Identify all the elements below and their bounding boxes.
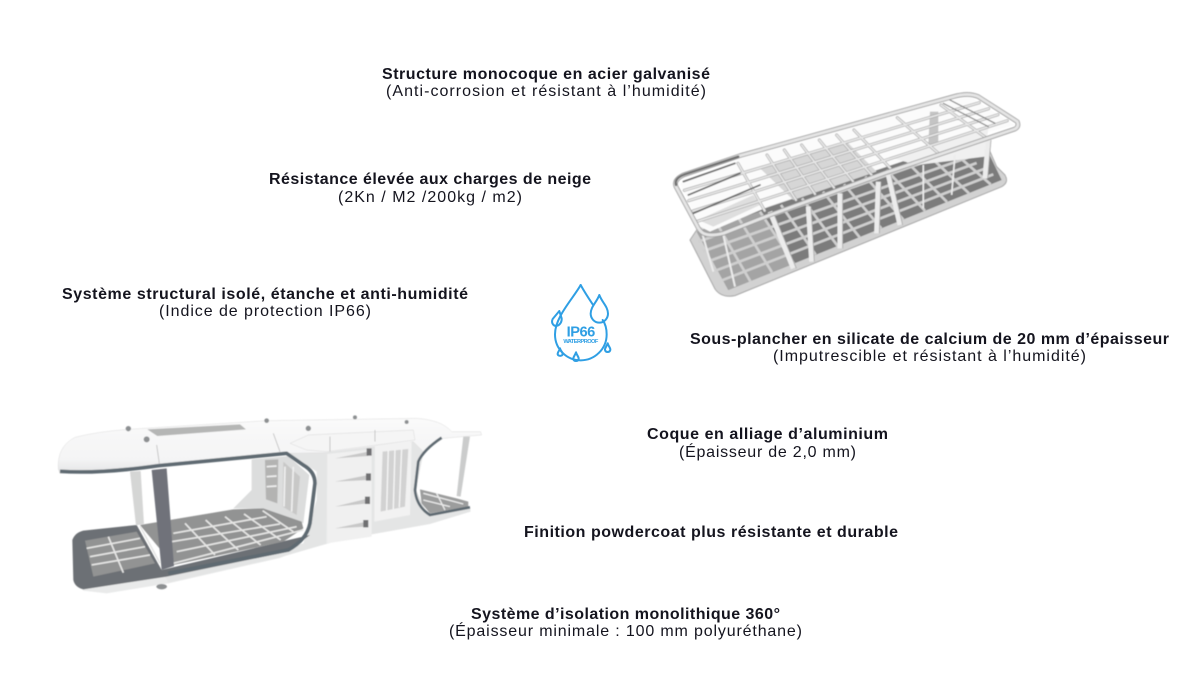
blue-grey edge trim: [60, 453, 315, 573]
roof: [58, 418, 482, 473]
floor grid: [87, 511, 303, 573]
right post: [457, 437, 470, 497]
right floor: [420, 489, 468, 513]
text block: monolithic insulation: (Épaisseur minimale : 100 mm polyuréthane): [449, 621, 802, 640]
floor deck: [72, 525, 310, 589]
text block: calcium silicate subfloor: Sous-plancher en silicate de calcium de 20 mm d’épaisseur: [690, 331, 1169, 348]
ventilation panel: [374, 442, 412, 522]
text block: calcium silicate subfloor: [690, 331, 1169, 365]
text block: aluminium shell: (Épaisseur de 2,0 mm): [679, 442, 856, 461]
wall panels: [327, 449, 372, 543]
right opening trim: [415, 438, 470, 515]
text block: monocoque structure: Structure monocoque en acier galvanisé: [382, 66, 710, 83]
text block: snow load resistance: [269, 171, 591, 206]
floor grid: [698, 148, 993, 281]
text block: insulated waterproof system: Système structural isolé, étanche et anti-humidité: [62, 286, 468, 303]
text block: monolithic insulation: [449, 606, 802, 640]
interior wall: [233, 456, 309, 523]
text block: insulated waterproof system: (Indice de protection IP66): [159, 303, 371, 320]
text block: insulated waterproof system: [62, 286, 468, 320]
text block: monocoque structure: (Anti-corrosion et résistant à l’humidité): [386, 83, 706, 100]
roof tubes: [675, 94, 1018, 235]
text block: aluminium shell: [647, 426, 888, 461]
text block: monolithic insulation: Système d’isolation monolithique 360°: [471, 606, 780, 623]
front post: [152, 468, 174, 570]
rooftop skylight: [147, 424, 246, 436]
icon: IP66 waterproof drop: IP66: [567, 324, 595, 340]
text block: snow load resistance: Résistance élevée aux charges de neige: [269, 171, 591, 188]
image: bare galvanized steel frame: [675, 94, 1018, 296]
icon: IP66 waterproof drop: WATERPROOF: [563, 339, 599, 345]
roof bolts: [126, 415, 409, 589]
floor deck: [690, 128, 1007, 296]
text block: powdercoat finish: Finition powdercoat plus résistante et durable: [524, 524, 898, 541]
body wall: [162, 437, 471, 583]
text block: monocoque structure: [382, 66, 710, 100]
text block: calcium silicate subfloor: (Imputrescible et résistant à l’humidité): [773, 348, 1086, 365]
icon: IP66 waterproof drop: [552, 285, 610, 361]
image: finished white aluminium pod: [58, 415, 482, 593]
text block: aluminium shell: Coque en alliage d’aluminium: [647, 426, 888, 443]
posts: [703, 140, 988, 287]
floor underside lip: [73, 543, 307, 593]
text block: snow load resistance: (2Kn / M2 /200kg / m2): [338, 189, 522, 206]
roof infill: [680, 97, 1015, 232]
back post: [130, 471, 144, 525]
body upper ridge: [290, 430, 415, 452]
